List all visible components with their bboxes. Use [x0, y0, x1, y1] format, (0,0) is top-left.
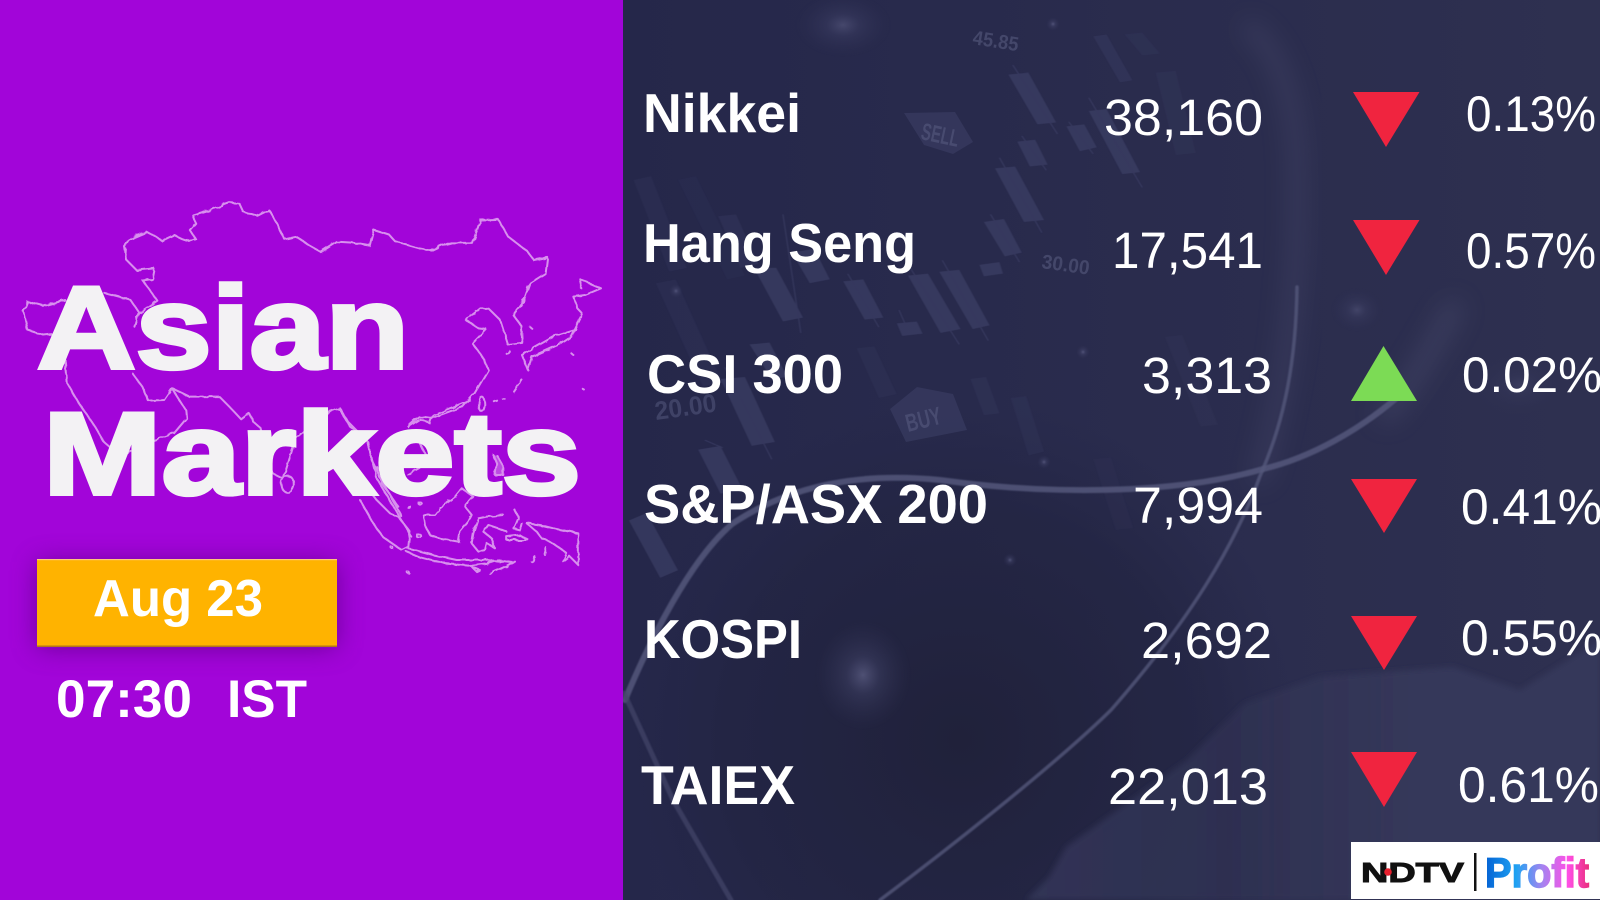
illustration: buy tag [890, 387, 967, 442]
index value: 38,160 [1104, 89, 1263, 146]
index name: Nikkei [643, 82, 801, 144]
index name: TAIEX [641, 754, 795, 816]
logo wordmark NDTV: NDTV [1361, 857, 1464, 888]
index name: CSI 300 [647, 343, 843, 405]
logo wordmark Profit: Profit [1485, 849, 1589, 896]
chart label 30.00: 30.00 [1040, 251, 1091, 280]
illustration: sell tag [904, 112, 973, 154]
row: KOSPI [644, 608, 1600, 670]
date badge: Aug 23: Aug 23 [93, 570, 263, 628]
down arrow [1351, 616, 1417, 670]
index name: S&P/ASX 200 [644, 473, 988, 535]
title: Markets: Markets [43, 388, 581, 519]
index value: 2,692 [1141, 612, 1272, 669]
index name: KOSPI [644, 608, 802, 670]
row: TAIEX [641, 752, 1599, 816]
title: Asian: Asian [37, 262, 409, 393]
map of Asia outline [24, 203, 601, 574]
row: CSI 300 [647, 343, 1600, 405]
row: Nikkei [643, 82, 1596, 147]
logo red dot [1384, 868, 1392, 876]
time: 07:30: 07:30 [56, 670, 192, 729]
illustration: glowing trend curves [624, 29, 1453, 900]
down arrow [1351, 752, 1417, 807]
chart label 20.00: 20.00 [653, 388, 718, 426]
index value: 7,994 [1133, 477, 1263, 534]
index value: 3,313 [1142, 347, 1272, 404]
panel: purple title panel [0, 0, 623, 900]
logo: NDTV Profit [1351, 842, 1600, 899]
panel: market table background [620, 0, 1600, 900]
down arrow [1353, 92, 1420, 147]
illustration: hand silhouette [1026, 640, 1600, 900]
row: Hang Seng [643, 212, 1596, 279]
up arrow [1351, 346, 1417, 401]
percent change: 0.41% [1461, 479, 1600, 535]
index value: 22,013 [1108, 758, 1268, 815]
percent change: 0.55% [1461, 610, 1600, 666]
down arrow [1353, 220, 1420, 275]
index name: Hang Seng [643, 212, 916, 274]
illustration: sell tag: SELL [919, 118, 962, 153]
row: S&P/ASX 200 [644, 473, 1600, 535]
down arrow [1351, 479, 1417, 533]
percent change: 0.61% [1458, 757, 1599, 813]
index value: 17,541 [1112, 222, 1263, 279]
illustration: bokeh glow [669, 0, 1566, 730]
time zone: IST: IST [227, 670, 307, 729]
chart label 45.85: 45.85 [971, 27, 1020, 56]
date badge: Aug 23 [37, 559, 337, 648]
illustration: buy tag: BUY [903, 402, 945, 438]
illustration: candlestick chart [629, 33, 1218, 578]
percent change: 0.02% [1462, 347, 1600, 403]
logo separator [1474, 853, 1476, 891]
